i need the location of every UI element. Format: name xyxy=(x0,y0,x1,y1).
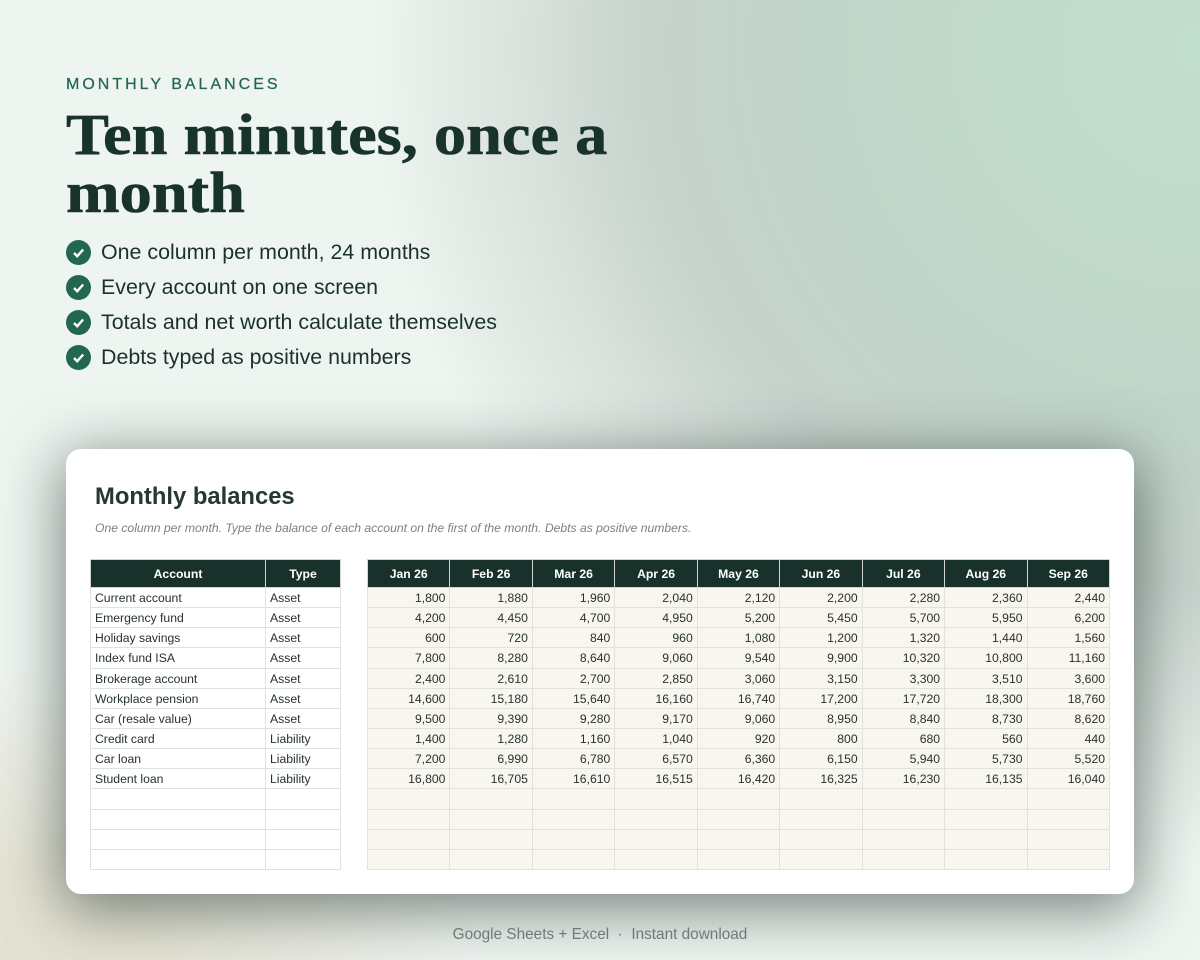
table: monthly balances: 960 xyxy=(672,631,693,645)
table: monthly balances: 9,500 xyxy=(415,712,445,726)
table: monthly balances: 6,200 xyxy=(1074,611,1105,625)
table: accounts: Holiday savings xyxy=(95,631,180,645)
footer: Google Sheets + Excel · Instant download xyxy=(453,926,747,943)
table: monthly balances: 4,450 xyxy=(497,611,528,625)
table: accounts: Current account xyxy=(95,591,182,605)
table: monthly balances: 4,200 xyxy=(415,611,445,625)
table: monthly balances: 1,280 xyxy=(497,732,528,746)
table: accounts: Credit card xyxy=(95,732,155,746)
list item: totals: Totals and net worth calculate themselves xyxy=(101,310,497,334)
table: monthly balances: 1,400 xyxy=(415,732,445,746)
table: monthly balances: 2,120 xyxy=(745,591,775,605)
table: monthly balances: 2,200 xyxy=(827,591,858,605)
table: monthly balances: 2,360 xyxy=(992,591,1022,605)
card heading: Monthly balances xyxy=(95,483,295,510)
table: monthly balances: 840 xyxy=(590,631,610,645)
table: accounts: Index fund ISA xyxy=(95,651,175,665)
table: monthly balances: 6,780 xyxy=(580,752,610,766)
table: monthly balances: 7,800 xyxy=(415,651,445,665)
table: monthly balances: 15,640 xyxy=(573,692,610,706)
table: monthly balances: 1,560 xyxy=(1074,631,1105,645)
table: monthly balances: 2,700 xyxy=(580,672,610,686)
table: monthly balances: 4,700 xyxy=(580,611,610,625)
table: accounts: Car (resale value) xyxy=(95,712,192,726)
table: monthly balances: 16,325 xyxy=(820,772,858,786)
table: monthly balances: 2,610 xyxy=(497,672,528,686)
table: monthly balances: 7,200 xyxy=(415,752,445,766)
table: monthly balances: 9,060 xyxy=(745,712,775,726)
table: monthly balances: 1,160 xyxy=(580,732,610,746)
table: monthly balances: 3,150 xyxy=(827,672,858,686)
table: monthly balances: 800 xyxy=(837,732,858,746)
table: monthly balances: Jul 26 xyxy=(886,566,921,580)
table: monthly balances: 5,520 xyxy=(1074,752,1105,766)
table: monthly balances: 920 xyxy=(755,732,775,746)
table: monthly balances: 10,800 xyxy=(985,651,1022,665)
table: monthly balances: 2,440 xyxy=(1074,591,1105,605)
table: monthly balances: Jan 26 xyxy=(390,566,428,580)
table: monthly balances: 3,300 xyxy=(910,672,940,686)
table: monthly balances: 15,180 xyxy=(491,692,528,706)
table: monthly balances: 9,170 xyxy=(662,712,693,726)
table: accounts: Brokerage account xyxy=(95,672,197,686)
table: monthly balances: 8,730 xyxy=(992,712,1022,726)
table: monthly balances: 17,720 xyxy=(903,692,940,706)
title: Ten minutes, once a xyxy=(66,102,607,167)
table: monthly balances: 14,600 xyxy=(408,692,445,706)
table: monthly balances: May 26 xyxy=(718,566,759,580)
table: monthly balances: 680 xyxy=(920,732,940,746)
table: monthly balances: 16,610 xyxy=(573,772,610,786)
table: monthly balances: 9,390 xyxy=(497,712,528,726)
table: monthly balances: 2,040 xyxy=(662,591,693,605)
table: monthly balances: 6,360 xyxy=(745,752,775,766)
table: monthly balances: 3,060 xyxy=(745,672,775,686)
table: monthly balances: 16,420 xyxy=(738,772,775,786)
table: monthly balances: 1,200 xyxy=(827,631,858,645)
table: accounts: Liability xyxy=(270,732,311,746)
table: monthly balances: 8,620 xyxy=(1074,712,1105,726)
table: monthly balances: 16,515 xyxy=(655,772,693,786)
table: monthly balances: 6,570 xyxy=(662,752,693,766)
table: monthly balances: 9,060 xyxy=(662,651,693,665)
table: accounts: Car loan xyxy=(95,752,141,766)
table: monthly balances: 16,160 xyxy=(655,692,693,706)
feature list xyxy=(66,240,497,370)
table: monthly balances: 18,760 xyxy=(1068,692,1105,706)
eyebrow: MONTHLY BALANCES xyxy=(66,76,281,93)
table: monthly balances: Aug 26 xyxy=(965,566,1006,580)
table: monthly balances: 560 xyxy=(1002,732,1022,746)
table: monthly balances: 4,950 xyxy=(662,611,693,625)
table: monthly balances: 1,440 xyxy=(992,631,1022,645)
table: accounts: Asset xyxy=(270,712,300,726)
table: monthly balances: 1,080 xyxy=(745,631,775,645)
table: monthly balances: 8,640 xyxy=(580,651,610,665)
table: monthly balances: 5,940 xyxy=(910,752,940,766)
table: monthly balances: 10,320 xyxy=(903,651,940,665)
card subtitle: One column per month. Type the balance of each account on the first of the month. Debts as positive numbers. xyxy=(95,521,691,535)
table: monthly balances: 9,540 xyxy=(745,651,775,665)
table: accounts xyxy=(90,559,341,870)
table: monthly balances: 1,960 xyxy=(580,591,610,605)
table: monthly balances: 11,160 xyxy=(1069,651,1105,665)
table: monthly balances: 5,200 xyxy=(745,611,775,625)
table: accounts: Liability xyxy=(270,752,311,766)
table: monthly balances: 1,040 xyxy=(662,732,693,746)
table: accounts: Workplace pension xyxy=(95,692,198,706)
list item: columns: One column per month, 24 months xyxy=(101,240,430,264)
table: monthly balances: 600 xyxy=(425,631,445,645)
table: monthly balances: 9,900 xyxy=(827,651,858,665)
table: monthly balances: 1,800 xyxy=(415,591,445,605)
table: monthly balances: 5,450 xyxy=(827,611,858,625)
title: month xyxy=(66,160,245,225)
table: monthly balances: 6,990 xyxy=(497,752,528,766)
list item: debts: Debts typed as positive numbers xyxy=(101,345,411,369)
table: monthly balances: 2,850 xyxy=(662,672,693,686)
table: accounts: Asset xyxy=(270,672,300,686)
panel: spreadsheet card xyxy=(66,449,1134,894)
table: monthly balances: 3,600 xyxy=(1074,672,1105,686)
table: monthly balances: Jun 26 xyxy=(802,566,840,580)
table: accounts: Account xyxy=(154,566,202,580)
table: monthly balances: 16,040 xyxy=(1068,772,1105,786)
table: monthly balances: Sep 26 xyxy=(1049,566,1088,580)
table: monthly balances: 16,740 xyxy=(738,692,775,706)
table: accounts: Emergency fund xyxy=(95,611,184,625)
table: monthly balances: 16,800 xyxy=(408,772,445,786)
table: monthly balances: Apr 26 xyxy=(637,566,675,580)
table: accounts: Student loan xyxy=(95,772,163,786)
table: monthly balances: 440 xyxy=(1085,732,1105,746)
table: monthly balances: 5,730 xyxy=(992,752,1022,766)
table: monthly balances: 8,280 xyxy=(497,651,528,665)
table: accounts: Asset xyxy=(270,631,300,645)
table: monthly balances: 16,135 xyxy=(985,772,1022,786)
table: monthly balances: 720 xyxy=(508,631,528,645)
table: monthly balances: 3,510 xyxy=(992,672,1022,686)
table: monthly balances: 5,950 xyxy=(992,611,1022,625)
table: monthly balances: 17,200 xyxy=(820,692,858,706)
title xyxy=(66,102,607,225)
table: monthly balances: 8,840 xyxy=(910,712,940,726)
table: accounts: Asset xyxy=(270,611,300,625)
table: monthly balances: 18,300 xyxy=(985,692,1022,706)
table: accounts: Type xyxy=(289,566,317,580)
table: accounts: Asset xyxy=(270,692,300,706)
table: accounts: Asset xyxy=(270,591,300,605)
list item: accounts: Every account on one screen xyxy=(101,275,378,299)
table: monthly balances xyxy=(367,559,1110,870)
table: monthly balances: Feb 26 xyxy=(472,566,510,580)
table: monthly balances: 2,280 xyxy=(910,591,940,605)
table: monthly balances: 1,320 xyxy=(910,631,940,645)
table: accounts: Liability xyxy=(270,772,311,786)
table: monthly balances: 6,150 xyxy=(827,752,858,766)
table: monthly balances: 16,230 xyxy=(903,772,940,786)
table: monthly balances: 5,700 xyxy=(910,611,940,625)
table: monthly balances: 2,400 xyxy=(415,672,445,686)
table: monthly balances: 9,280 xyxy=(580,712,610,726)
table: monthly balances: Mar 26 xyxy=(554,566,593,580)
table: monthly balances: 8,950 xyxy=(827,712,858,726)
table: monthly balances: 1,880 xyxy=(497,591,528,605)
table: accounts: Asset xyxy=(270,651,300,665)
table: monthly balances: 16,705 xyxy=(491,772,528,786)
